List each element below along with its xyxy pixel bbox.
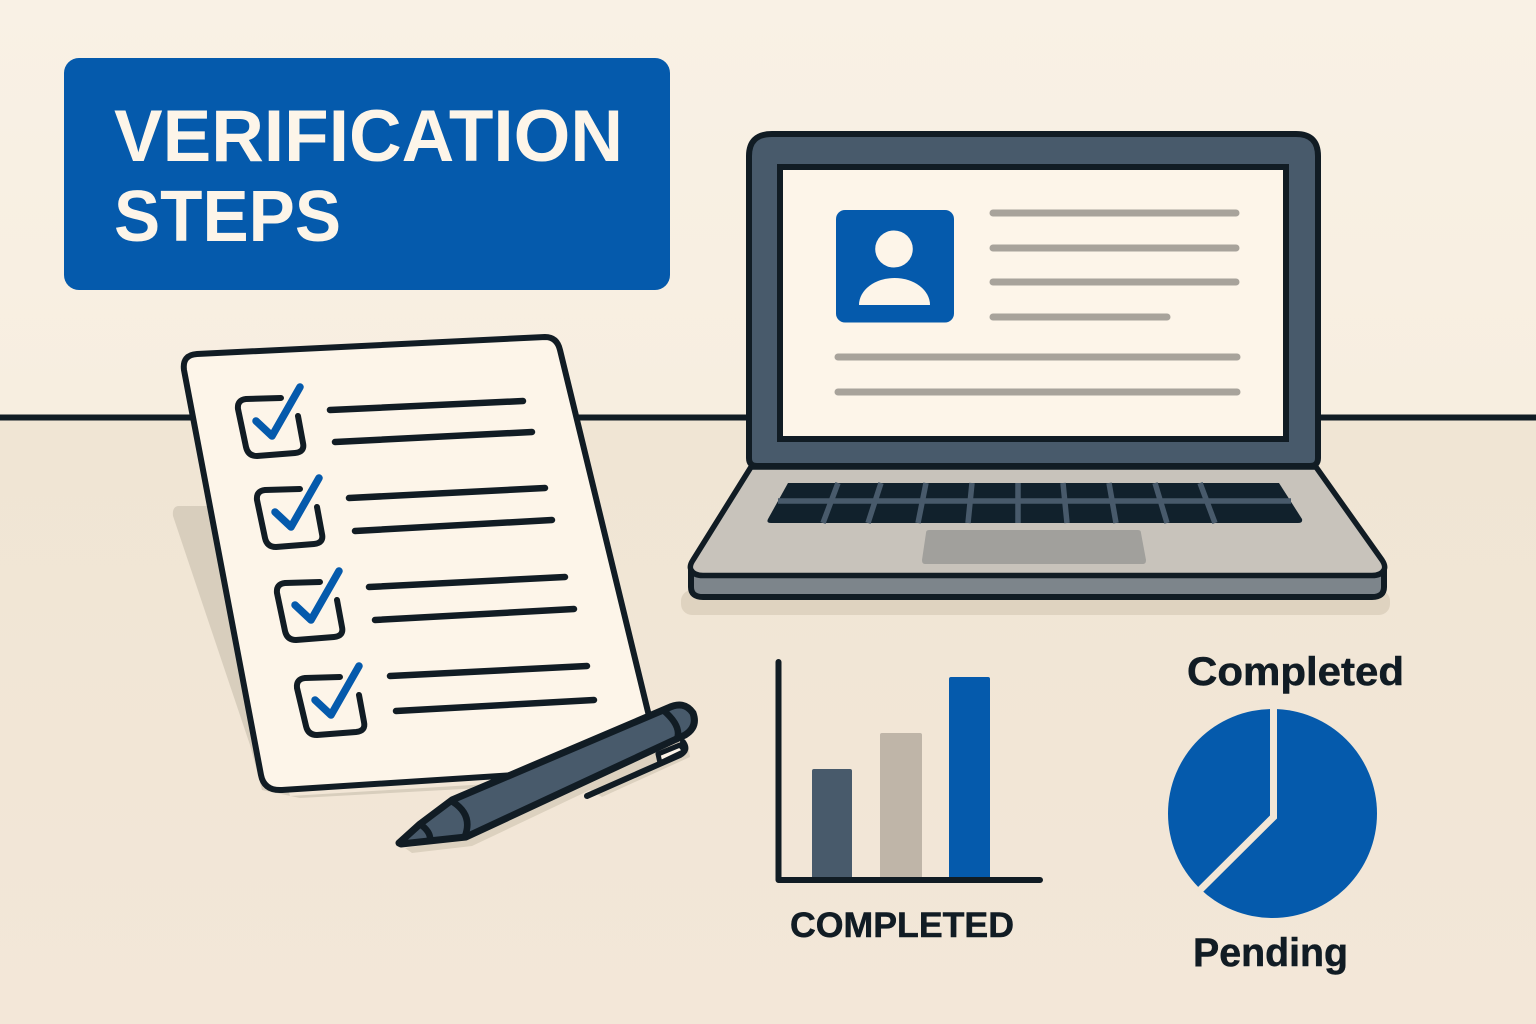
bar grey: [880, 733, 922, 878]
checklist item 3: [277, 571, 574, 640]
desk surface: [0, 418, 1536, 1024]
profile avatar icon: [836, 210, 954, 322]
pen rings: [420, 710, 678, 840]
paper sheet: [184, 337, 649, 790]
trackpad: [922, 530, 1146, 564]
pie label completed: Completed: [1187, 650, 1404, 694]
background wall: [0, 0, 1536, 418]
bar chart: [778, 662, 1040, 945]
checklist item 4: [297, 666, 594, 735]
pen clip: [658, 745, 685, 763]
title banner: [64, 58, 670, 290]
laptop: [681, 134, 1390, 615]
pen body: [399, 705, 694, 844]
laptop front edge: [691, 568, 1384, 597]
pen: [399, 705, 694, 853]
laptop screen: [780, 167, 1286, 439]
bar chart label: COMPLETED: [790, 906, 1014, 945]
pie disc: [1168, 709, 1377, 918]
chart axes: [778, 662, 1040, 880]
checklist item 2: [257, 478, 552, 547]
bar dark: [812, 769, 852, 878]
pie label pending: Pending: [1193, 931, 1348, 975]
checklist item 1: [238, 387, 532, 456]
desk horizon line: [0, 414, 1536, 420]
paper shadow: [173, 506, 505, 798]
laptop shadow: [681, 590, 1390, 615]
bar blue: [949, 677, 990, 878]
title line 2: STEPS: [114, 177, 341, 257]
profile text lines: [838, 213, 1237, 392]
laptop lid: [749, 134, 1318, 466]
pen shadow: [405, 738, 690, 853]
checklist paper: [173, 337, 649, 798]
keyboard: [767, 483, 1302, 523]
laptop base: [690, 467, 1385, 576]
title line 1: VERIFICATION: [114, 96, 623, 177]
pie slice gap: [1198, 704, 1274, 892]
pie chart: [1168, 650, 1404, 975]
